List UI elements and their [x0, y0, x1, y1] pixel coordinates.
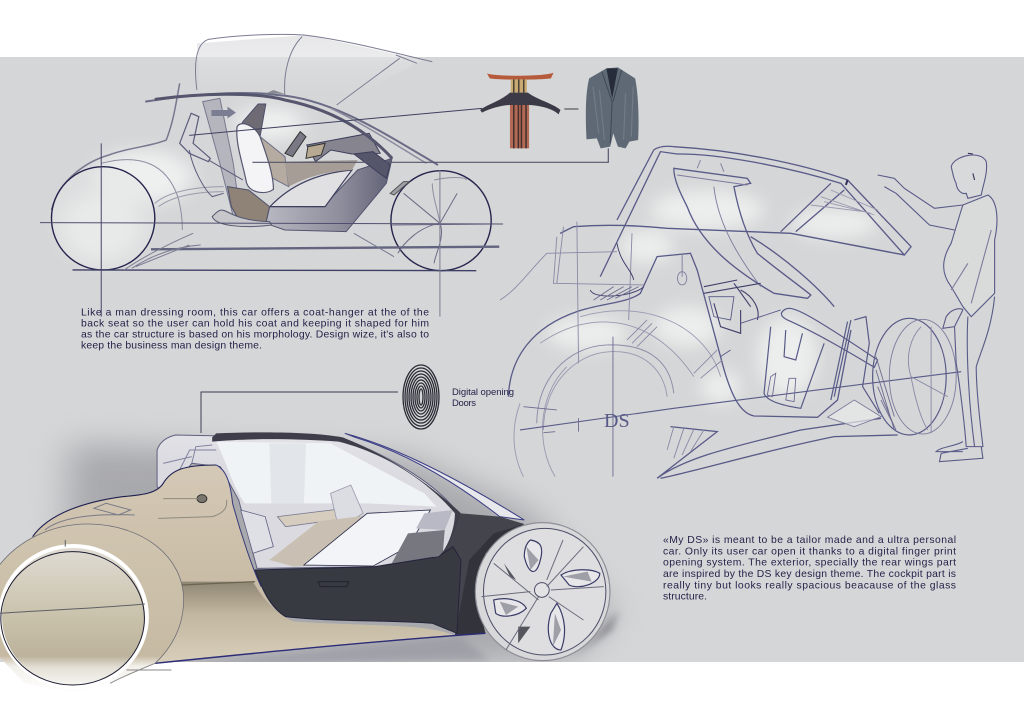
- upper rear contour: [33, 465, 216, 537]
- interior steering area: [704, 280, 761, 333]
- text block: My DS description: «My DS» is meant to be a tailor made and a ultra personal: [663, 535, 956, 546]
- glass canopy: [157, 435, 459, 568]
- roof bar: [560, 225, 904, 255]
- centre line: [520, 372, 961, 430]
- text block: coat-hanger description: as the car structure is based on his morphology. Design wize, it's also to: [81, 330, 429, 340]
- text block: My DS description: [663, 535, 956, 603]
- dashboard: [307, 133, 380, 162]
- fingerprint icon: [403, 365, 439, 429]
- wheel arches: [537, 345, 674, 423]
- text block: coat-hanger description: keep the business man design theme.: [81, 340, 262, 352]
- front wheel: [0, 546, 147, 687]
- text block: My DS description: structure.: [663, 592, 707, 603]
- door inner panel: [674, 168, 811, 298]
- seat panel: [764, 327, 824, 408]
- rear wheel: [475, 523, 610, 661]
- wheel: [873, 318, 946, 435]
- coat on seat: [237, 124, 273, 193]
- text block: coat-hanger description: back seat so the user can hold his coat and keeping it shaped for him: [81, 318, 429, 330]
- interior seat: [241, 510, 273, 553]
- door sill tube: [781, 308, 878, 367]
- rear wing outline: [51, 83, 180, 210]
- text block: My DS description: opening system. The exterior, specially the rear wings part: [663, 558, 956, 569]
- arrow on seat: [211, 107, 236, 118]
- leader: fingerprint to car: [201, 392, 398, 433]
- leader: coat: [252, 148, 608, 162]
- text block: coat-hanger description: Like a man dressing room, this car offers a coat-hanger at the of the: [81, 308, 429, 318]
- leader: hanger: [189, 108, 482, 135]
- front wheel: [391, 171, 491, 271]
- tan body: [0, 465, 453, 663]
- open door outer frame: [600, 146, 911, 277]
- sill: [212, 210, 272, 227]
- icon: blazer: [586, 67, 639, 148]
- raised door outline: [195, 34, 432, 90]
- sill shading: [157, 582, 453, 663]
- interior taupe panels: [228, 187, 270, 223]
- body highlights: [63, 107, 304, 260]
- front seat: [239, 104, 266, 137]
- seat frame: [203, 98, 241, 220]
- text block: coat-hanger description: [81, 308, 429, 352]
- icon: coat hanger: [480, 73, 560, 148]
- windscreen highlight: [216, 442, 437, 507]
- text block: My DS description: are inspired by the DS key design theme. The cockpit part is: [663, 569, 956, 580]
- dash between hanger and coat: [564, 108, 578, 110]
- rendered car: [0, 432, 618, 693]
- dark door: [255, 547, 461, 633]
- rear body and door opening: [508, 253, 851, 417]
- hand on wheel: [943, 309, 963, 328]
- arm: [878, 175, 963, 230]
- raised door highlight: [197, 35, 423, 105]
- fingerprint label: [452, 387, 514, 409]
- wheel spokes: [392, 193, 492, 263]
- lower sill: [657, 418, 898, 478]
- interior floor: [266, 158, 392, 232]
- text block: My DS description: really tiny but looks really spacious beacause of the glass: [663, 580, 956, 591]
- handwritten DS logo: DS: [604, 410, 630, 432]
- fingerprint label: Digital opening: [452, 387, 514, 398]
- rear wheel: [51, 167, 155, 270]
- shadow: [61, 443, 618, 667]
- button on body: [197, 495, 207, 503]
- roof highlight: [345, 433, 524, 520]
- text block: My DS description: car. Only its user car open it thanks to a digital finger print: [663, 546, 956, 557]
- arm: [277, 507, 359, 527]
- legs: [955, 297, 995, 447]
- ground and construction lines: [73, 269, 476, 272]
- fender: [0, 524, 184, 693]
- head: [951, 155, 987, 198]
- rear glass structure: [163, 445, 216, 470]
- sketch: side view of car with coat hanger: [40, 34, 608, 317]
- fingerprint label: Doors: [452, 398, 476, 409]
- roof line: [145, 93, 438, 165]
- front wheel inner line: [1, 552, 144, 685]
- dark pillar: [432, 513, 524, 633]
- person: [878, 153, 997, 462]
- shoes: [936, 442, 983, 462]
- white door panel reflection: [304, 510, 430, 566]
- highlights: [547, 190, 878, 403]
- sketch: car with open door and person: [500, 146, 997, 478]
- dark roof band: [212, 432, 461, 557]
- interior door light panel: [270, 170, 352, 207]
- floor board: [269, 510, 408, 567]
- torso: [944, 195, 997, 317]
